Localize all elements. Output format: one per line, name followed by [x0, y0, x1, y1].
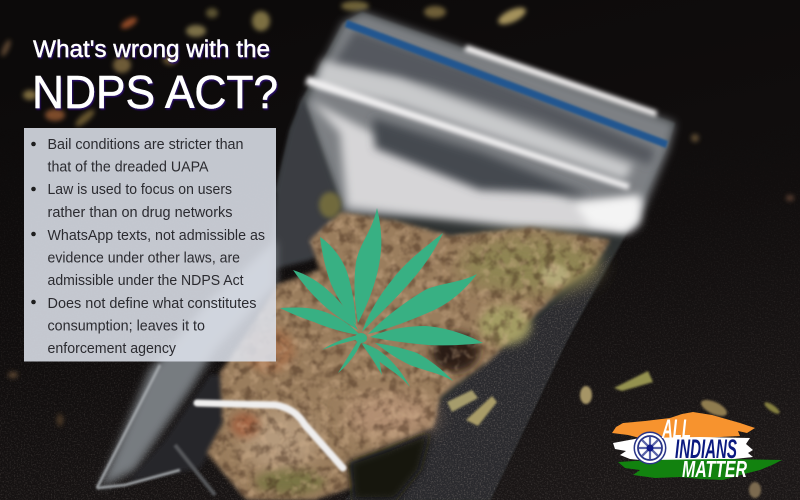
- bag blue seal stripe: [345, 20, 668, 148]
- bag bright streak: [305, 76, 630, 190]
- title: NDPS ACT?: [32, 66, 278, 118]
- logo wheel: [634, 432, 666, 464]
- bullet text: evidence under other laws, are: [48, 250, 240, 266]
- bag white top strip: [464, 45, 657, 117]
- bullet text: Does not define what constitutes: [48, 296, 256, 312]
- logo: All Indians Matter: [612, 412, 782, 482]
- logo white stroke: [613, 437, 753, 461]
- bullet text: Bail conditions are stricter than: [48, 137, 244, 153]
- bag upper dark streak: [330, 30, 655, 165]
- bag bright patch right: [575, 195, 640, 232]
- bullet text: consumption; leaves it to: [48, 318, 205, 334]
- icon: cannabis leaf: [280, 208, 483, 387]
- photo: plastic bag: [270, 12, 675, 500]
- photo: cannabis buds: [200, 192, 620, 500]
- bag lower right dark film: [345, 255, 612, 500]
- photo: lower-left clear bag corner: [97, 240, 276, 495]
- bag dark strip: [373, 118, 590, 195]
- logo wordmark: [661, 414, 747, 482]
- bullet text: WhatsApp texts, not admissible as: [48, 228, 265, 244]
- title: What's wrong with the: [33, 36, 270, 63]
- panel: bullet list: [24, 128, 276, 362]
- photo: white plastic crease: [197, 403, 343, 468]
- bullet text: Law is used to focus on users: [48, 182, 232, 198]
- bag lower fog: [310, 100, 643, 232]
- logo wordmark: INDIANS: [675, 434, 737, 464]
- logo saffron stroke: [612, 412, 755, 438]
- logo wordmark: ALL: [661, 414, 691, 444]
- logo green stroke: [618, 459, 782, 480]
- bag left speckled area: [270, 97, 345, 270]
- title: [32, 36, 278, 118]
- photo: loose flakes on surface: [447, 371, 781, 498]
- bullet markers: [31, 142, 36, 304]
- bag light upper streak: [315, 60, 633, 180]
- bullet text: that of the dreaded UAPA: [48, 160, 209, 176]
- bag base: [276, 12, 675, 500]
- bullet text: [48, 137, 265, 357]
- bullet text: rather than on drug networks: [48, 205, 232, 221]
- bud texture: [200, 205, 620, 500]
- bullet text: admissible under the NDPS Act: [48, 273, 244, 289]
- bullet text: enforcement agency: [48, 341, 177, 357]
- bag upper gray: [303, 12, 675, 230]
- logo wordmark: MATTER: [682, 456, 747, 482]
- bag shadow below bud: [350, 432, 430, 500]
